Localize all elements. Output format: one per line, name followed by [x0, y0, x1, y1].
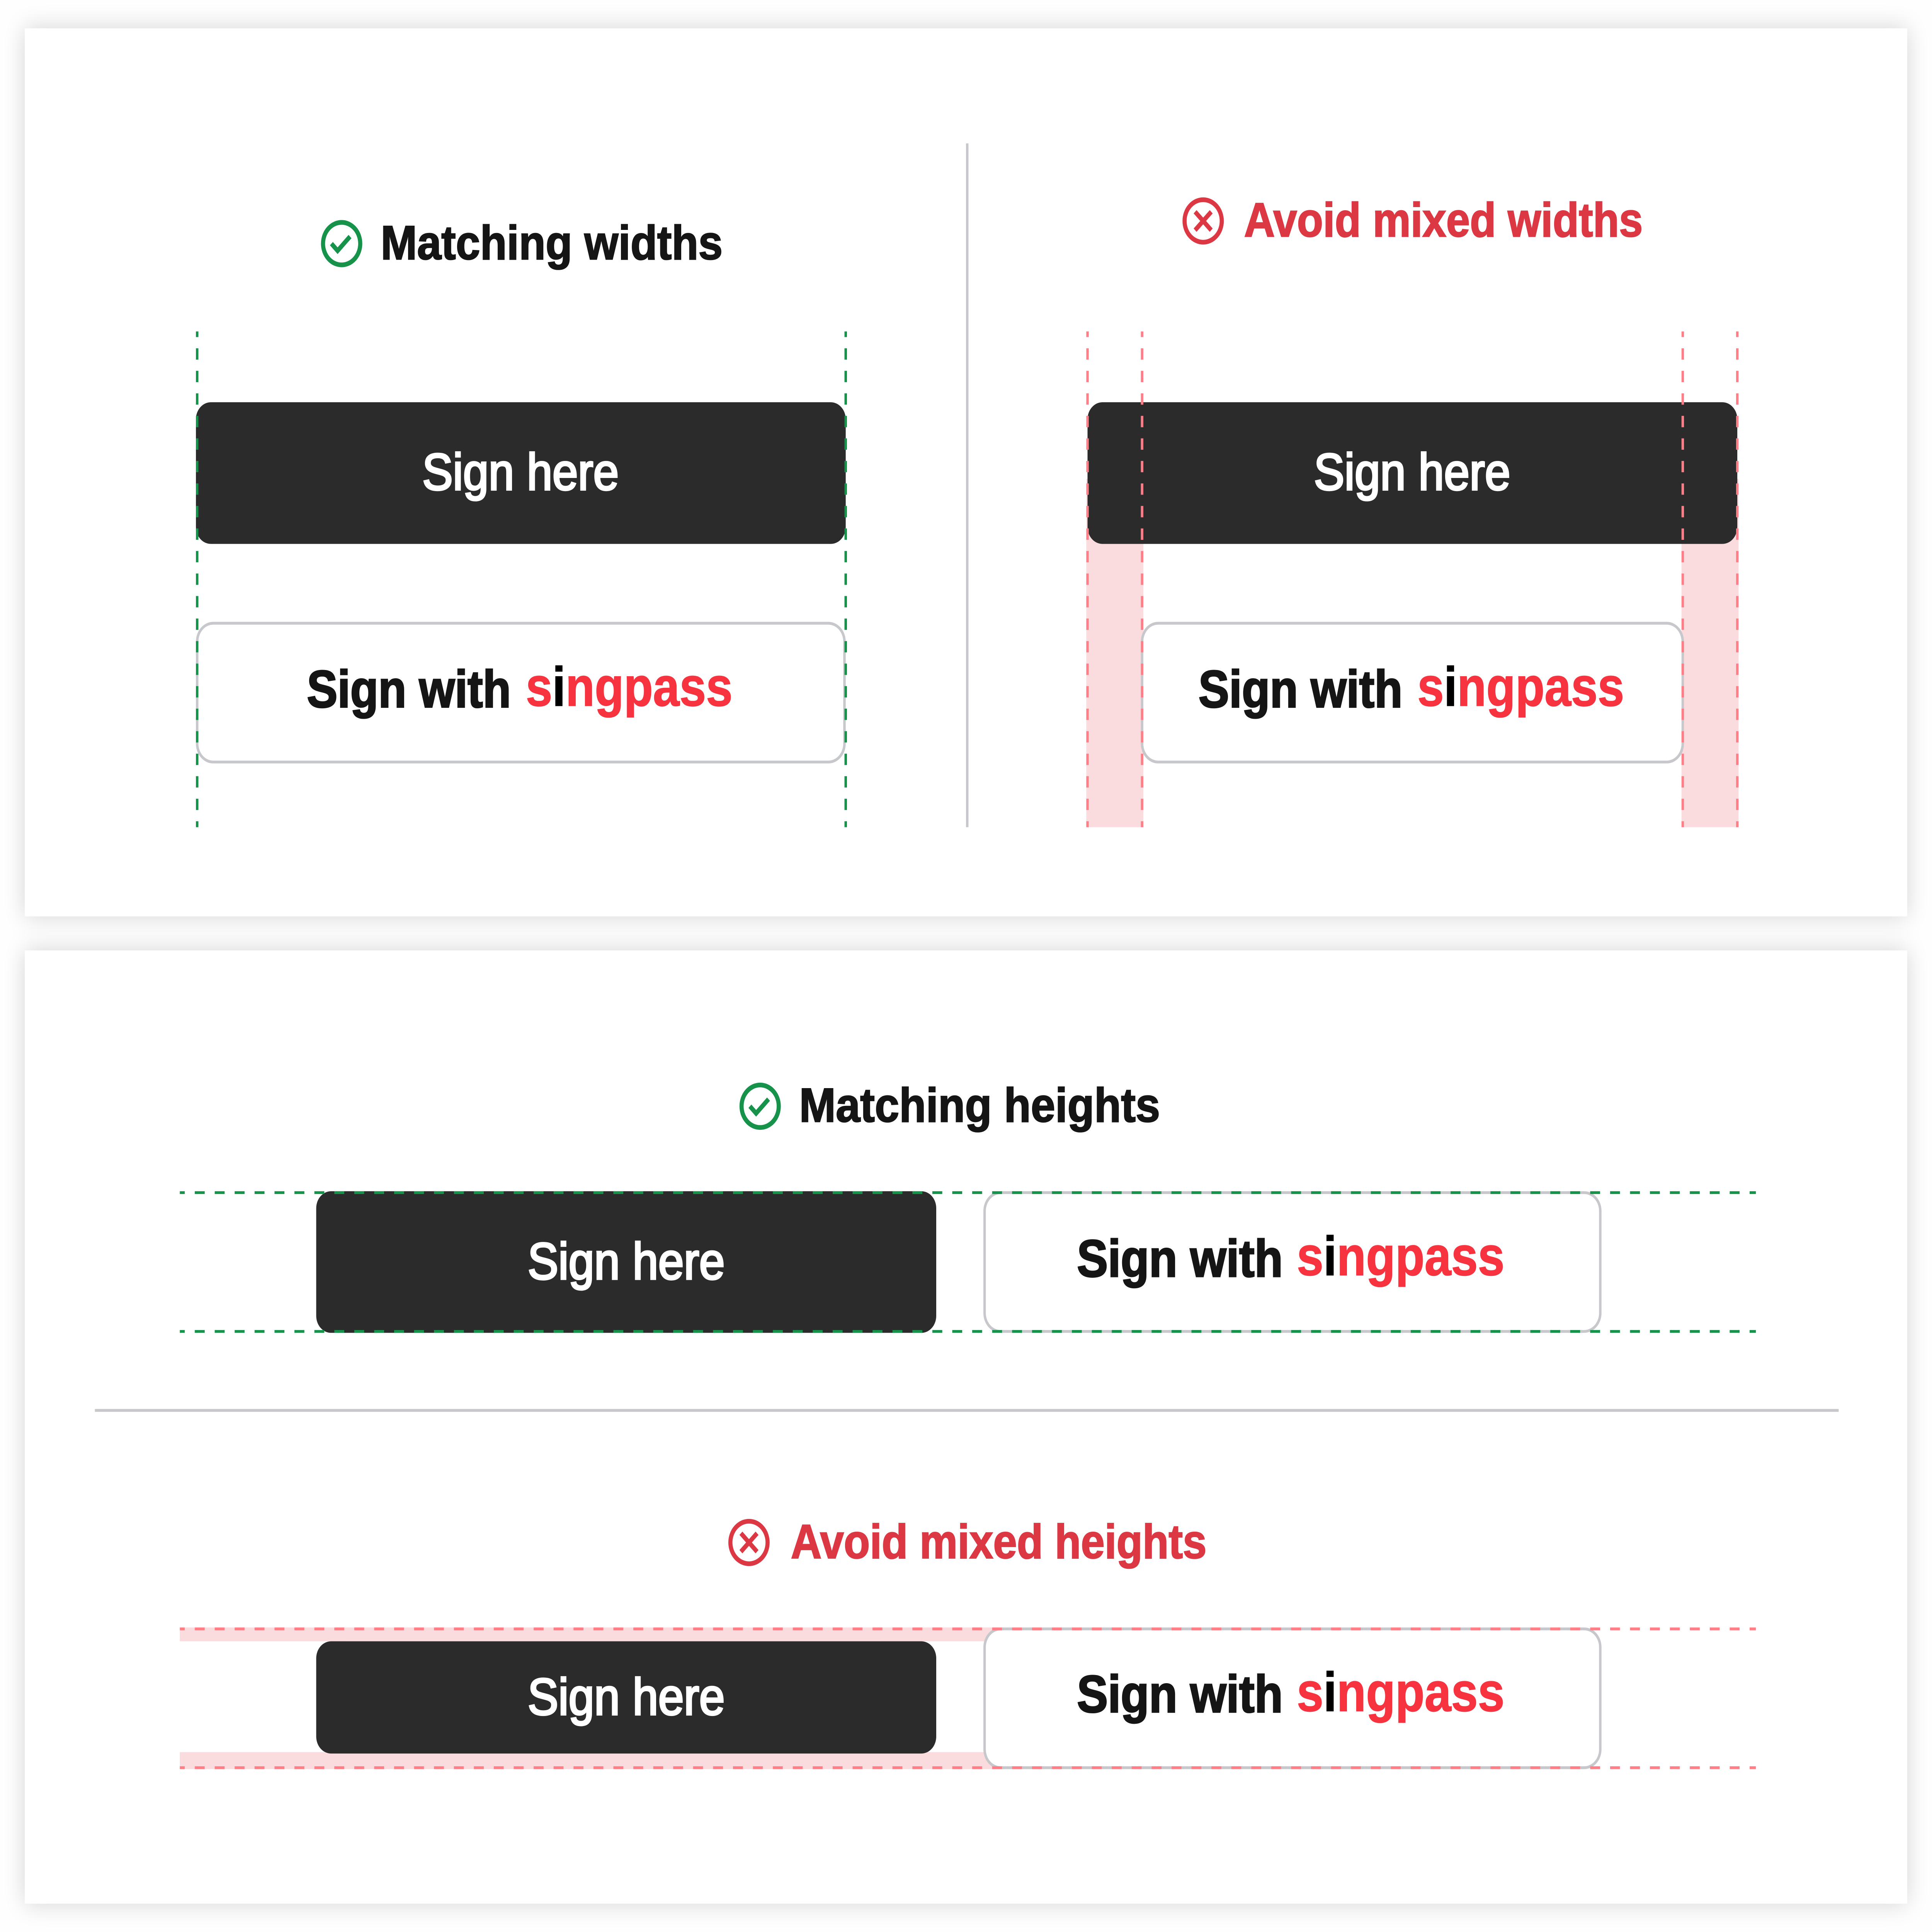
pink mismatch strips [1086, 479, 1738, 827]
mixed heights example [180, 1514, 1756, 1769]
green guide lines [197, 332, 846, 827]
divider: horizontal [95, 1409, 1839, 1412]
red guide lines [1088, 332, 1737, 827]
outlined button: sign with singpass: singpass [526, 656, 733, 718]
icon: green check [323, 223, 360, 265]
matching widths example [196, 216, 846, 827]
outlined button: sign with singpass: singpass [1297, 1661, 1505, 1723]
heading: avoid mixed widths: Avoid mixed widths [1244, 193, 1643, 247]
dark button: sign here: Sign here [1314, 443, 1510, 501]
dark button: sign here [316, 1191, 936, 1333]
icon: green check [742, 1085, 779, 1128]
dark button: sign here: Sign here [528, 1232, 725, 1290]
heading: avoid mixed heights: Avoid mixed heights [791, 1514, 1207, 1568]
green guide lines [180, 1193, 1756, 1332]
outlined button: sign with singpass: Sign with [1077, 1665, 1283, 1724]
dark button: sign here [1088, 402, 1737, 544]
outlined button: sign with singpass: singpass [1417, 656, 1624, 718]
heading: matching heights: Matching heights [799, 1078, 1160, 1132]
divider: vertical [966, 143, 968, 827]
pink mismatch bands [180, 1628, 998, 1769]
outlined button: sign with singpass: Sign with [307, 660, 511, 719]
outlined button: sign with singpass [985, 1193, 1600, 1332]
dark button: sign here [196, 402, 846, 544]
icon: red cross [1185, 200, 1222, 242]
matching heights example [180, 1078, 1756, 1333]
mixed widths example [1086, 193, 1738, 827]
red guide lines [180, 1629, 1756, 1768]
dark button: sign here [316, 1641, 936, 1753]
outlined button: sign with singpass: Sign with [1077, 1230, 1283, 1288]
panel: widths comparison [25, 28, 1907, 917]
outlined button: sign with singpass: singpass [1297, 1225, 1505, 1287]
outlined button: sign with singpass [1142, 623, 1683, 762]
outlined button: sign with singpass: Sign with [1199, 660, 1403, 719]
outlined button: sign with singpass [197, 623, 844, 762]
heading: matching widths: Matching widths [381, 216, 723, 269]
outlined button: sign with singpass [985, 1629, 1600, 1768]
icon: red cross [730, 1521, 768, 1564]
panel: heights comparison [25, 951, 1907, 1904]
dark button: sign here: Sign here [528, 1668, 725, 1726]
dark button: sign here: Sign here [422, 443, 619, 501]
